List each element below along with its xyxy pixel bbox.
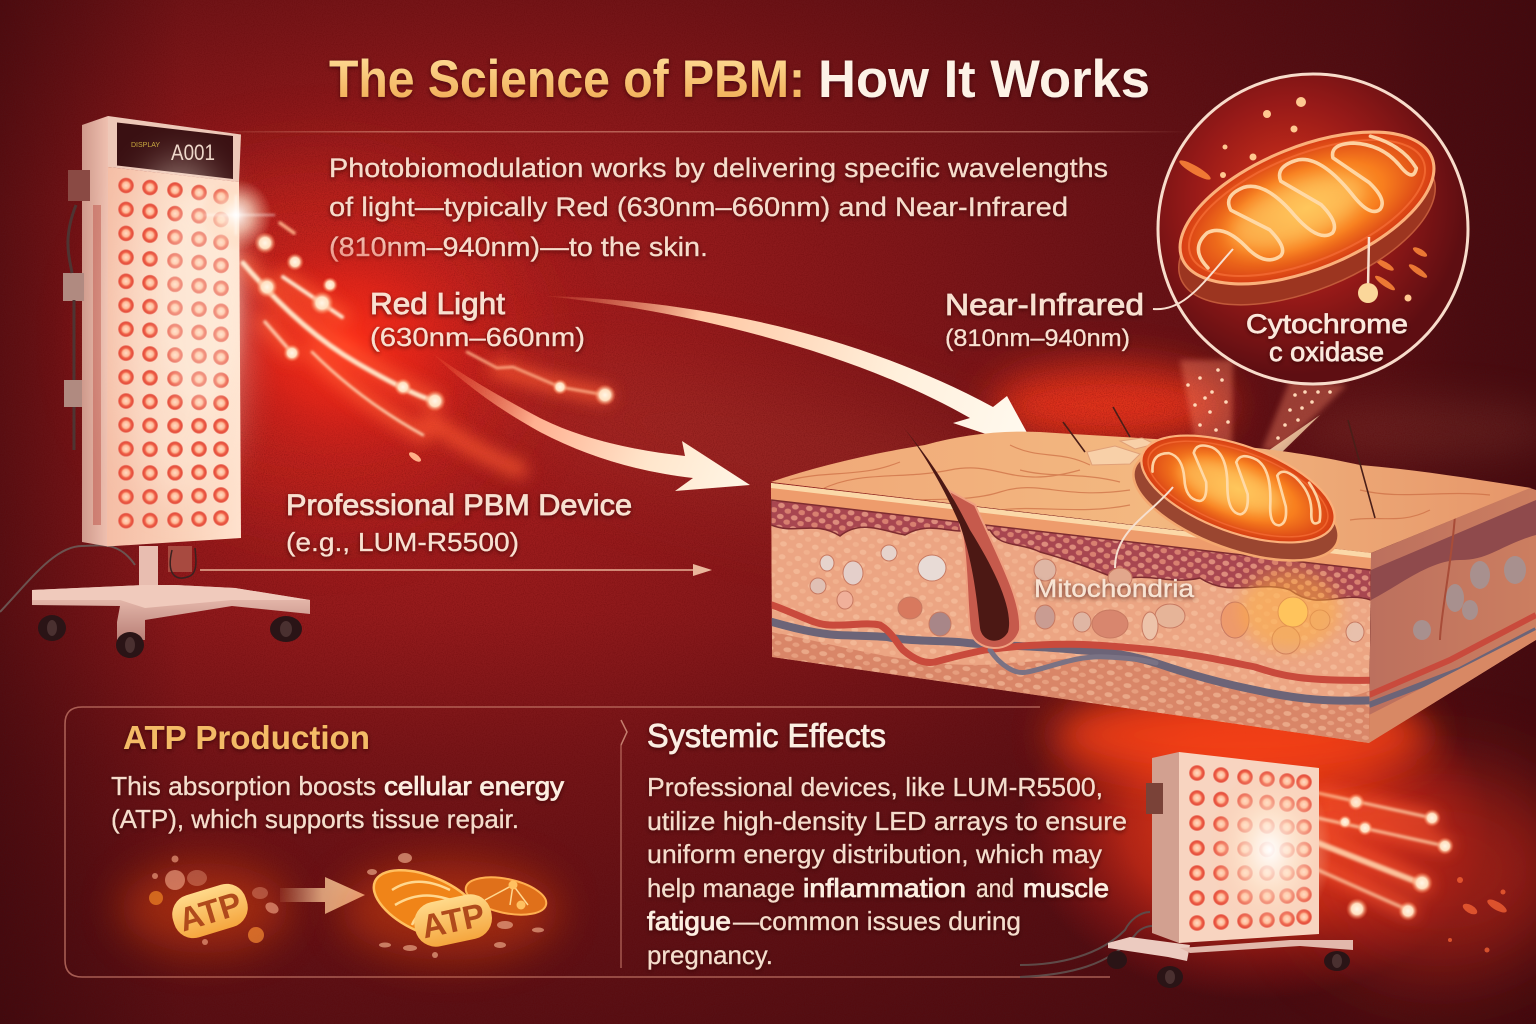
label: professional device: Professional PBM Device <box>286 489 632 522</box>
blood vessels <box>772 605 1380 701</box>
systemic effects description: uniform energy distribution, which may <box>647 839 1102 869</box>
compact device cables <box>1020 912 1152 977</box>
systemic effects description: muscle <box>1023 873 1109 903</box>
device cable <box>0 545 135 612</box>
ATP description: This absorption boosts <box>111 771 376 801</box>
mitochondrion on skin <box>1119 414 1353 583</box>
dermis cells <box>810 545 1364 654</box>
arrow: red light <box>432 353 750 491</box>
bottom panel frame <box>65 707 1110 977</box>
device display: DISPLAY <box>131 142 160 149</box>
device side boxes <box>63 170 90 450</box>
heading: systemic effects: Systemic Effects <box>647 717 886 754</box>
skin top surface <box>771 407 1531 553</box>
intro paragraph: of light—typically Red (630nm–660nm) and Near-Infrared <box>329 192 1068 222</box>
label: red light: (630nm–660nm) <box>370 322 585 352</box>
systemic effects description: —common issues during <box>733 906 1021 936</box>
compact device base <box>1107 937 1353 988</box>
mitochondrion shell <box>1178 178 1436 306</box>
device side panel <box>82 116 108 546</box>
pointer: cytochrome c oxidase <box>1358 237 1378 303</box>
systemic effects description: inflammation <box>803 873 966 903</box>
systemic effects description: fatigue <box>647 906 731 936</box>
compact device LED panel <box>1179 752 1332 943</box>
systemic effects description: Professional devices, like LUM-R5500, <box>647 772 1103 802</box>
panel: ATP production <box>111 719 564 960</box>
skin cross-section <box>771 407 1536 783</box>
light rays from professional device <box>195 220 616 470</box>
label: mitochondria <box>1034 487 1194 603</box>
title: How It Works <box>818 50 1150 109</box>
epidermis cell band <box>771 500 1371 600</box>
intro paragraph: (810nm–940nm)—to the skin. <box>329 232 708 262</box>
arrow: near-infrared <box>545 296 1037 451</box>
compact device side <box>1152 752 1179 943</box>
systemic effects description: pregnancy. <box>647 940 773 970</box>
skin front face <box>771 478 1380 750</box>
label: professional device: (e.g., LUM-R5500) <box>286 527 519 557</box>
device display: A001 <box>171 140 215 165</box>
icon: depleted ATP pill: ATP <box>174 884 246 938</box>
label: near-infrared: Near-Infrared <box>945 287 1144 322</box>
compact PBM device <box>1020 752 1353 988</box>
label: near-infrared <box>945 287 1144 352</box>
light beam to magnified view <box>1180 360 1347 456</box>
ATP description: (ATP), which supports tissue repair. <box>111 804 519 834</box>
icon: charged mitochondria with ATP <box>340 853 560 960</box>
title <box>329 50 1150 109</box>
device display <box>117 122 233 179</box>
sparks <box>1220 97 1412 302</box>
magnified mitochondrion circle <box>1153 74 1468 384</box>
label: mitochondria: Mitochondria <box>1034 575 1194 603</box>
label: cytochrome c oxidase: c oxidase <box>1269 337 1384 367</box>
icon: charged mitochondria with ATP: ATP <box>418 896 488 945</box>
label: cytochrome c oxidase: Cytochrome <box>1246 309 1408 339</box>
title: The Science of PBM: <box>329 50 805 109</box>
ATP description: cellular energy <box>384 771 564 801</box>
label: red light <box>370 286 585 352</box>
icon: depleted ATP pill <box>120 856 290 953</box>
ATP description <box>111 771 564 834</box>
hair follicle <box>904 428 1020 648</box>
label: near-infrared: (810nm–940nm) <box>945 325 1130 352</box>
heading: ATP production: ATP Production <box>123 719 370 756</box>
label: red light: Red Light <box>370 286 505 321</box>
systemic effects description <box>647 772 1127 970</box>
systemic effects description: help manage <box>647 873 795 903</box>
label: professional device <box>286 489 632 557</box>
intro paragraph: Photobiomodulation works by delivering specific wavelengths <box>329 153 1108 183</box>
arrow: device pointer <box>200 564 712 576</box>
professional PBM device <box>0 116 310 658</box>
lower skin layer <box>772 632 1371 750</box>
arrow: ATP conversion <box>280 877 365 914</box>
device front header <box>108 116 241 182</box>
device LED panel <box>107 160 275 546</box>
skin side face <box>1369 480 1536 743</box>
systemic effects description: utilize high-density LED arrays to ensure <box>647 806 1127 836</box>
intro paragraph <box>329 153 1108 262</box>
device stand <box>32 546 310 658</box>
systemic effects description: and <box>976 873 1014 903</box>
pointer: near-infrared <box>1153 249 1233 309</box>
label: cytochrome c oxidase <box>1246 309 1408 367</box>
panel: systemic effects <box>647 717 1127 970</box>
compact PBM device glow and rays <box>1020 650 1536 1000</box>
